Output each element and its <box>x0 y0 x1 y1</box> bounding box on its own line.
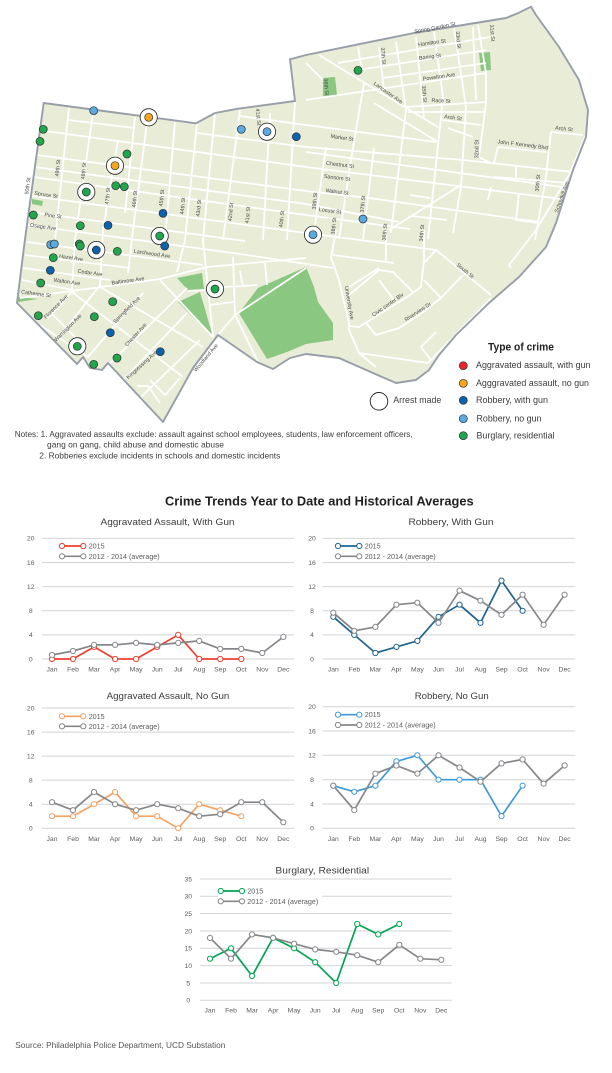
month labels: Apr <box>391 836 402 843</box>
month labels: Mar <box>88 836 101 843</box>
average line <box>52 637 283 655</box>
month labels: Sep <box>495 836 508 843</box>
street name labels: Locust St <box>318 207 342 216</box>
street name labels: 50th St <box>24 177 33 195</box>
street name labels: 46th St <box>132 190 139 208</box>
street name labels: Walton Ave <box>53 278 81 287</box>
chart legend: 2012 - 2014 (average) <box>89 552 160 561</box>
month labels: Sep <box>214 667 226 674</box>
month labels: Jul <box>332 1008 341 1015</box>
street name labels: Chestnut St <box>326 161 355 170</box>
arrest rings <box>69 109 322 355</box>
month labels: May <box>411 667 424 674</box>
y axis labels: 20 <box>27 705 35 712</box>
street name labels: Cedar Ave <box>77 269 103 278</box>
street name labels: 33rd St <box>454 31 461 49</box>
street name labels: 42nd St <box>228 202 235 222</box>
y axis labels: 16 <box>27 560 35 567</box>
y axis labels: 12 <box>27 753 35 760</box>
y axis labels <box>185 876 192 1005</box>
month labels: Feb <box>348 667 360 674</box>
legend: arrest made: Arrest made <box>393 395 441 405</box>
chart: robbery, no gun <box>308 691 575 843</box>
chart title: Robbery, No Gun <box>415 691 489 702</box>
street name labels: John F Kennedy Blvd <box>497 139 549 152</box>
y axis labels: 30 <box>185 894 192 901</box>
chart legend: 2015 <box>89 542 105 550</box>
street name labels: University Ave <box>343 286 354 320</box>
chart: aggravated assault, no gun <box>27 691 294 843</box>
month labels: Oct <box>517 836 528 843</box>
street name labels: 45th St <box>159 189 166 207</box>
month labels: Oct <box>517 667 528 674</box>
month labels: Jul <box>455 836 464 843</box>
month labels: May <box>288 1008 301 1015</box>
month labels: Apr <box>110 836 121 843</box>
street name labels: Larchwood Ave <box>133 249 171 260</box>
y axis labels: 16 <box>308 728 316 735</box>
chart title: Aggravated Assault, No Gun <box>107 691 229 702</box>
y axis labels: 4 <box>29 801 33 808</box>
street name labels: Hazel Ave <box>59 254 83 263</box>
street name labels: 38th St <box>331 217 338 235</box>
month labels: Dec <box>435 1008 448 1015</box>
legend entries: Robbery, no gun <box>476 413 542 423</box>
street name labels: 48th St <box>81 162 88 180</box>
street name labels: 31st St <box>488 24 495 42</box>
month labels: Feb <box>348 836 360 843</box>
month labels <box>328 667 571 674</box>
y axis labels: 0 <box>29 656 33 663</box>
chart legend <box>338 710 436 730</box>
street name labels: Woodland Ave <box>193 343 220 373</box>
legend entries: Aggravated assault, with gun <box>476 360 591 370</box>
month labels: May <box>130 667 143 674</box>
y axis labels <box>27 705 35 833</box>
street name labels: 35th St <box>420 85 427 103</box>
chart legend: 2015 <box>365 710 381 719</box>
y axis labels <box>27 536 35 663</box>
street name labels: Arch St <box>444 114 463 123</box>
month labels: Mar <box>88 667 101 674</box>
street name labels: 41st St <box>254 108 261 126</box>
month labels: Feb <box>225 1008 237 1015</box>
month labels: Sep <box>372 1008 384 1015</box>
month labels <box>205 1008 448 1015</box>
chart legend: 2012 - 2014 (average) <box>89 722 160 731</box>
street name labels: South St <box>455 262 475 281</box>
month labels: Dec <box>277 667 290 674</box>
street name labels: Osage Ave <box>30 223 56 232</box>
crime location dots <box>29 66 367 368</box>
month labels: Nov <box>256 667 269 674</box>
street name labels: 44th St <box>180 197 187 215</box>
chart legend: 2012 - 2014 (average) <box>365 720 436 729</box>
month labels: Feb <box>67 667 79 674</box>
street name labels: Spring Garden St <box>414 21 457 35</box>
chart title: Robbery, With Gun <box>408 517 493 528</box>
street name labels: 37th St <box>379 47 386 65</box>
2015 line <box>333 755 523 816</box>
y axis labels: 8 <box>310 777 314 784</box>
month labels: Mar <box>370 667 382 674</box>
y axis labels: 0 <box>310 826 314 833</box>
street name labels: Race St <box>431 98 451 105</box>
street name labels: Springfield Ave <box>112 295 142 325</box>
average line <box>333 755 565 810</box>
month labels: Jan <box>47 667 58 674</box>
street name labels: 36th St <box>382 223 389 241</box>
chart title: Aggravated Assault, With Gun <box>100 517 234 528</box>
street name labels: Sansom St <box>323 174 351 183</box>
street name labels <box>21 21 574 381</box>
month labels: Oct <box>236 667 247 674</box>
month labels: Jun <box>310 1008 321 1015</box>
y axis labels: 15 <box>185 946 192 953</box>
y axis labels: 16 <box>308 560 316 567</box>
month labels <box>47 836 290 843</box>
legend: type of crime <box>459 342 591 440</box>
street name labels: Warrington Ave <box>53 313 83 343</box>
y axis labels: 20 <box>185 928 192 935</box>
y axis labels: 10 <box>185 963 192 970</box>
street name labels: Hamilton St <box>418 38 447 48</box>
chart: robbery, with gun <box>308 517 575 674</box>
street name labels: 30th St <box>535 174 542 192</box>
month labels: Dec <box>277 836 290 843</box>
month labels: Aug <box>351 1008 363 1015</box>
month labels: Mar <box>246 1008 259 1015</box>
month labels: Jun <box>433 667 444 674</box>
average line <box>52 792 283 822</box>
month labels: Aug <box>193 836 205 843</box>
street name labels: Kingsessing Ave <box>126 350 159 381</box>
y axis labels: 25 <box>185 911 192 918</box>
street name labels: 40th St <box>279 210 286 228</box>
street name labels: 37th St <box>360 195 367 213</box>
map land area <box>17 7 588 422</box>
legend entries: Burglary, residential <box>476 430 555 440</box>
month labels: Jul <box>174 836 183 843</box>
y axis labels: 5 <box>186 980 190 987</box>
month labels: Nov <box>538 667 550 674</box>
month labels: Jun <box>433 836 444 843</box>
2015 line <box>210 924 399 983</box>
month labels: Oct <box>394 1008 405 1015</box>
month labels: Feb <box>67 836 79 843</box>
y axis labels: 4 <box>29 632 33 639</box>
month labels: Jul <box>174 667 183 674</box>
chart legend <box>221 886 318 906</box>
month labels: Apr <box>391 667 402 674</box>
chart: burglary, residential <box>185 866 452 1015</box>
notes: gang on gang, child abuse and domestic abuse <box>47 440 224 450</box>
month labels: Nov <box>414 1008 427 1015</box>
month labels: Sep <box>495 667 508 674</box>
month labels <box>47 667 290 674</box>
y axis labels <box>308 704 316 833</box>
chart legend: 2012 - 2014 (average) <box>365 552 436 561</box>
street name labels: Arch St <box>555 125 574 134</box>
street name labels: Schuylkill Ave <box>554 181 571 214</box>
legend entries: Robbery, with gun <box>476 395 548 405</box>
y axis labels: 12 <box>308 753 316 760</box>
street name labels: Walnut St <box>325 188 349 197</box>
y axis labels: 20 <box>27 536 35 543</box>
y axis labels: 35 <box>185 876 192 883</box>
average line <box>333 591 565 631</box>
month labels: Aug <box>474 667 487 674</box>
chart legend: 2012 - 2014 (average) <box>247 897 318 906</box>
street name labels: Market St <box>330 134 354 143</box>
street name labels: Riverview Dr <box>404 301 433 323</box>
y axis labels: 16 <box>27 729 35 736</box>
chart legend <box>62 712 160 731</box>
legend: arrest made <box>370 392 441 410</box>
notes: 2. Robberies exclude incidents in schools and domestic incidents <box>39 450 280 460</box>
month labels: Nov <box>538 836 550 843</box>
average line <box>210 934 441 962</box>
month labels: Jan <box>47 836 58 843</box>
month labels: Dec <box>559 667 571 674</box>
street name labels: Pine St <box>44 212 62 221</box>
legend heading: Type of crime <box>488 342 554 354</box>
map of neighbourhood <box>17 7 588 422</box>
y axis labels: 0 <box>29 826 33 833</box>
chart title: Burglary, Residential <box>275 865 369 876</box>
street name labels: 36th St <box>322 78 329 96</box>
y axis labels: 8 <box>29 608 33 615</box>
y axis labels: 0 <box>310 656 314 663</box>
month labels: Jun <box>152 836 163 843</box>
month labels: Aug <box>193 667 205 674</box>
chart: aggravated assault, with gun <box>27 517 294 674</box>
y axis labels: 8 <box>310 608 314 615</box>
month labels: Mar <box>370 836 382 843</box>
month labels: Apr <box>110 667 121 674</box>
street name labels: Chester Ave <box>124 322 148 348</box>
street name labels: Civic center Blv <box>371 292 405 318</box>
y axis labels: 4 <box>310 632 314 639</box>
street name labels: 47th St <box>105 187 112 205</box>
parks <box>18 52 491 359</box>
source line: Source: Philadelphia Police Department, UCD Substation <box>15 1041 226 1050</box>
month labels: Jan <box>328 667 339 674</box>
y axis labels: 4 <box>310 801 314 808</box>
y axis labels: 12 <box>27 584 35 591</box>
month labels: Sep <box>214 836 226 843</box>
chart legend: 2015 <box>89 712 105 721</box>
main charts title: Crime Trends Year to Date and Historical Averages <box>165 494 474 508</box>
street name labels: 43rd St <box>196 199 203 217</box>
y axis labels: 12 <box>308 584 316 591</box>
month labels: Dec <box>559 836 571 843</box>
street name labels: Lancaster Ave <box>372 81 403 106</box>
street name labels: 32nd St <box>474 139 480 158</box>
street name labels: 34th St <box>419 224 426 242</box>
y axis labels: 20 <box>308 536 316 543</box>
y axis labels: 0 <box>186 998 190 1005</box>
month labels: Nov <box>256 836 269 843</box>
2015 line <box>52 792 241 828</box>
legend entries <box>459 360 591 440</box>
2015 line <box>333 581 523 653</box>
month labels: May <box>130 836 143 843</box>
month labels <box>328 836 571 843</box>
month labels: May <box>411 836 424 843</box>
chart legend <box>338 542 436 561</box>
street name labels: Powelton Ave <box>423 72 456 83</box>
street name labels: Baltimore Ave <box>111 276 145 287</box>
street name labels: Spruce St <box>34 191 59 200</box>
month labels: Jan <box>205 1008 216 1015</box>
notes <box>15 429 413 460</box>
map boundary <box>17 7 588 422</box>
2015 line <box>52 635 241 659</box>
month labels: Jul <box>455 667 464 674</box>
street name labels: Catherine St <box>21 289 52 300</box>
street name labels: 39th St <box>312 192 319 210</box>
y axis labels: 20 <box>308 704 316 711</box>
y axis labels: 8 <box>29 777 33 784</box>
month labels: Apr <box>268 1008 279 1015</box>
street name labels: Florence Ave <box>43 294 70 321</box>
month labels: Oct <box>236 836 247 843</box>
notes: Notes: 1. Aggravated assaults exclude: assault against school employees, students, law enforcement officers, <box>15 429 413 439</box>
chart legend: 2015 <box>247 886 263 895</box>
street network <box>20 25 586 403</box>
month labels: Jun <box>152 667 163 674</box>
street name labels: 49th St <box>55 159 62 177</box>
chart legend <box>62 542 160 561</box>
y axis labels <box>308 536 316 663</box>
chart legend: 2015 <box>365 542 381 550</box>
legend entries: Agggravated assault, no gun <box>476 378 589 388</box>
street name labels: Baring St <box>419 53 442 62</box>
street name labels: 41st St <box>245 206 252 224</box>
month labels: Aug <box>474 836 487 843</box>
month labels: Jan <box>328 836 339 843</box>
